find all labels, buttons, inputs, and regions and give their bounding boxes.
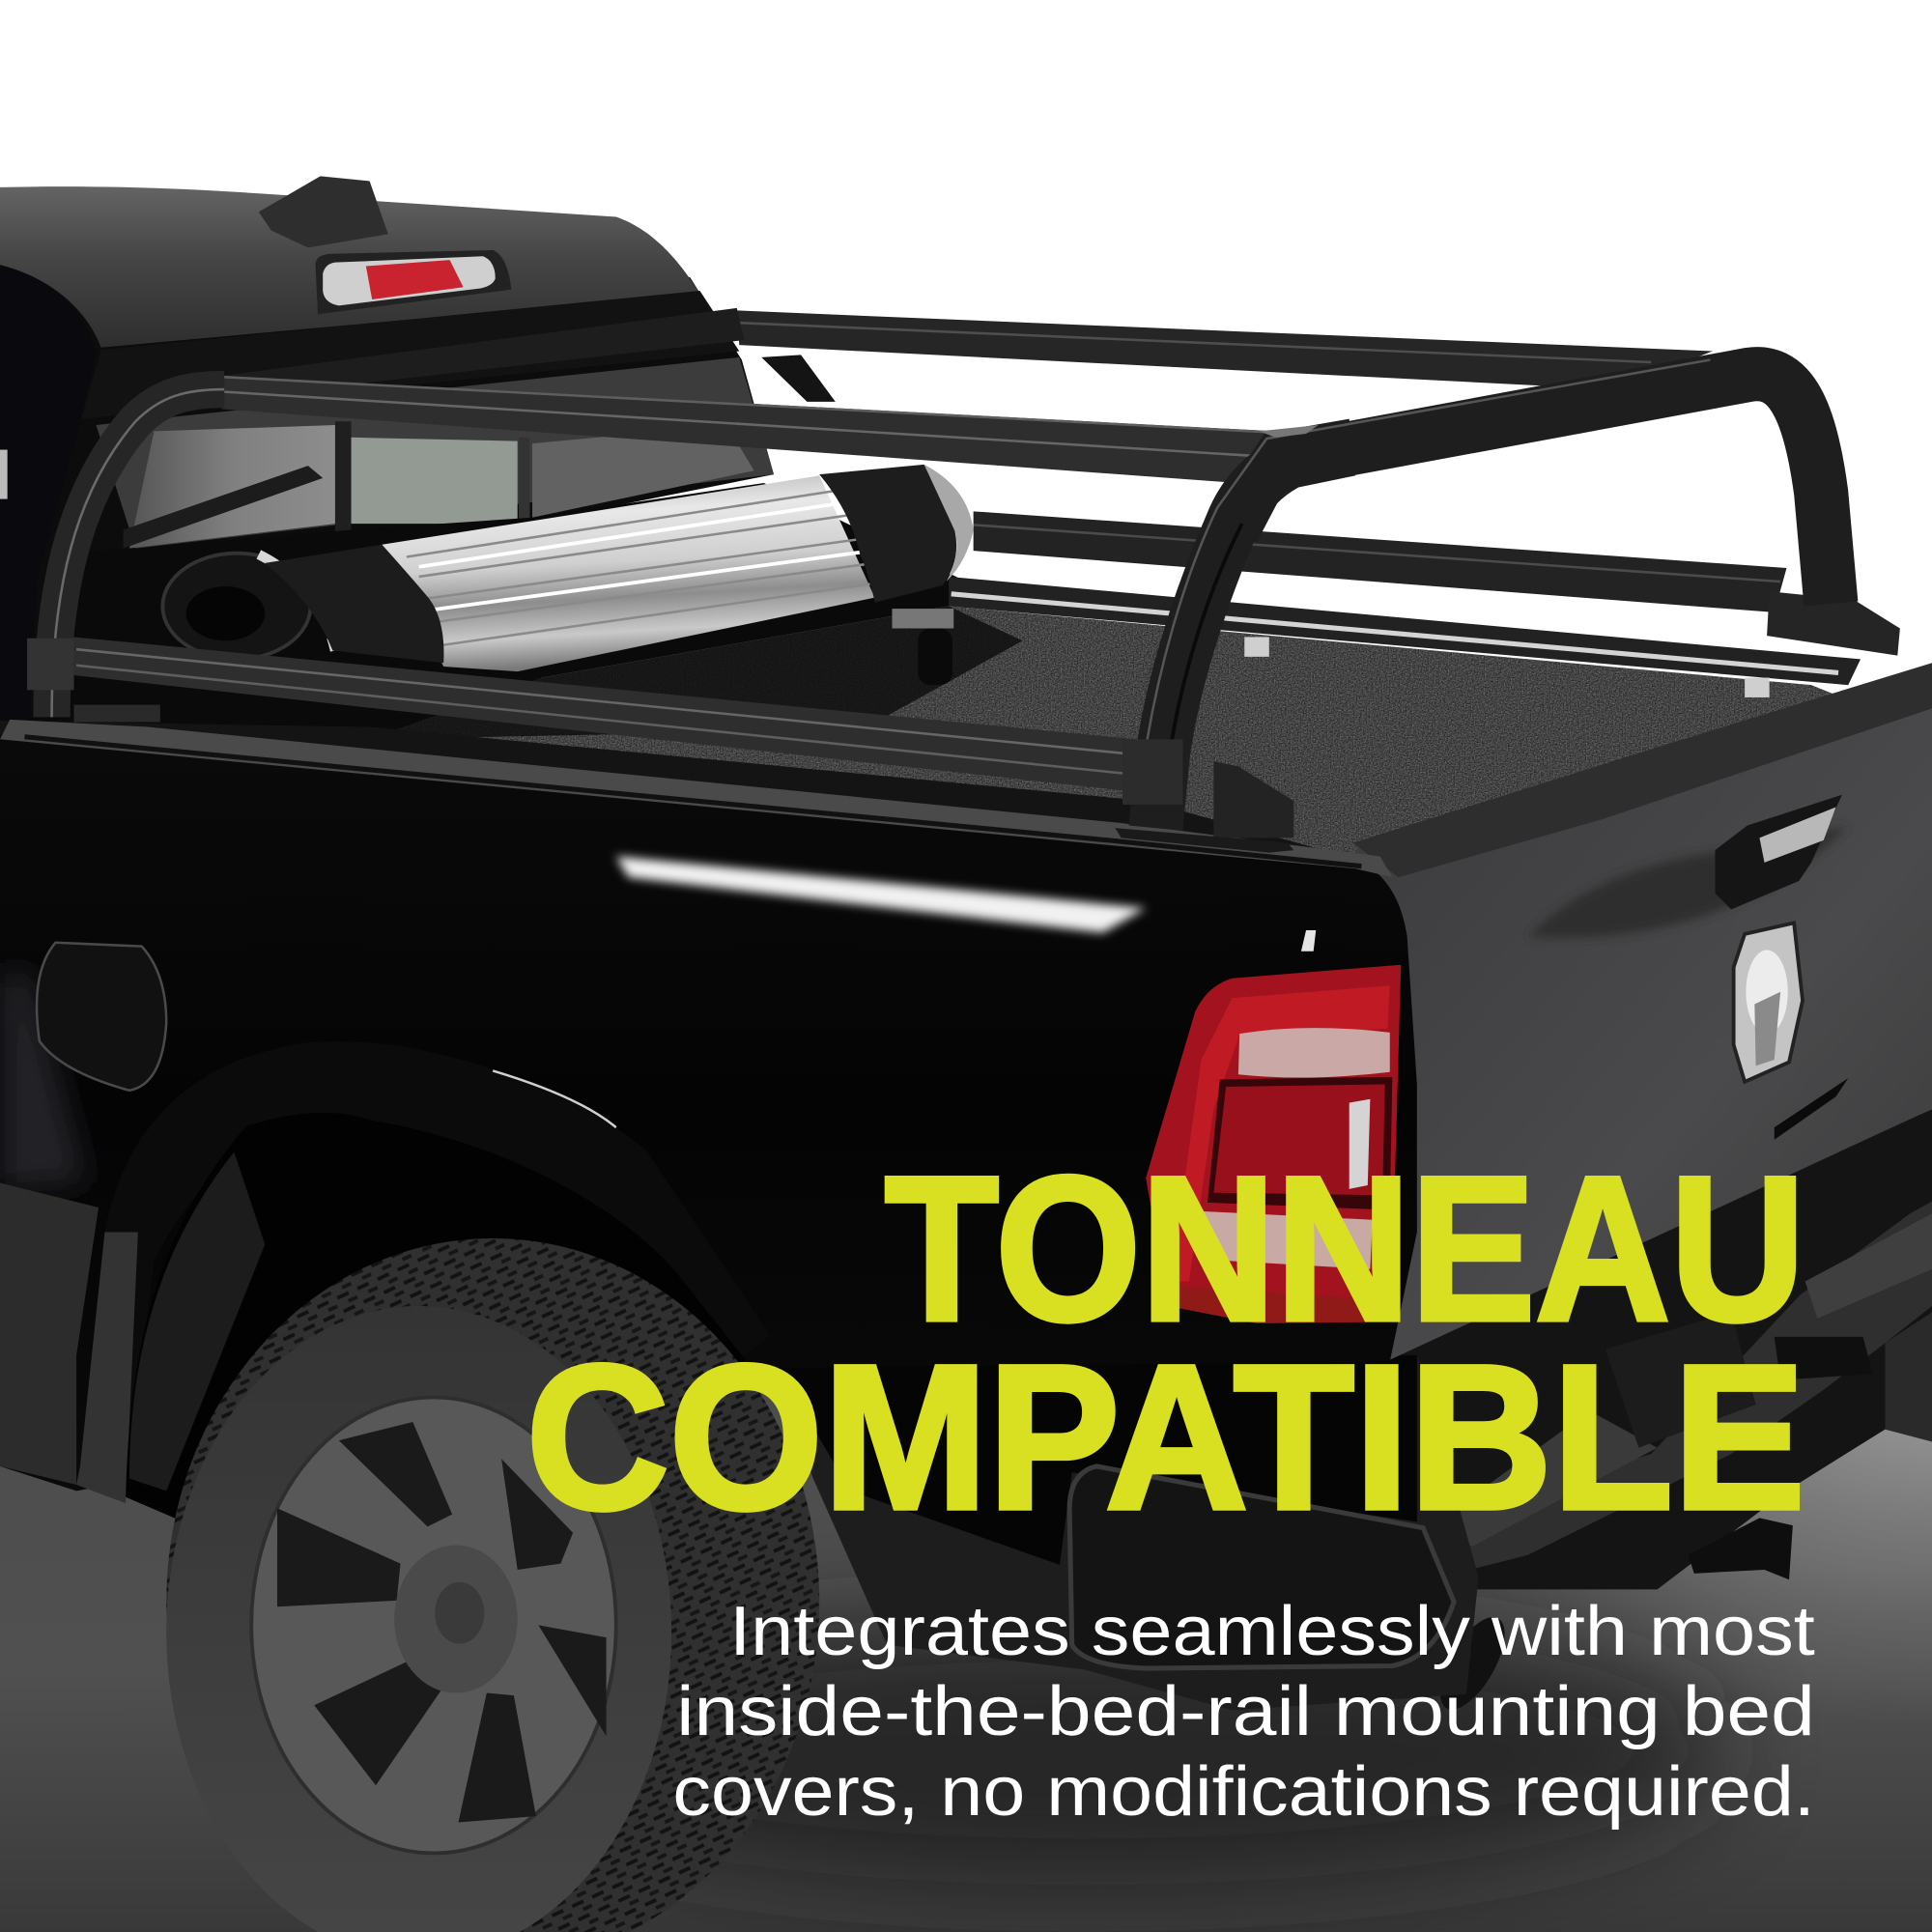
- far bed rail: [949, 577, 1861, 685]
- cab roof: [0, 186, 699, 348]
- wheel openings: [277, 1422, 607, 1822]
- corner cap: [1260, 425, 1319, 438]
- front rack arch: [27, 389, 224, 722]
- wheel hub: [394, 1545, 518, 1693]
- tailgate: [1355, 690, 1932, 1361]
- wheel liner: [129, 1152, 265, 1491]
- tailgate cap: [1353, 663, 1932, 877]
- rear window: [96, 357, 774, 549]
- cab-side top rail: [222, 308, 744, 401]
- icon: ram badge: [1734, 923, 1803, 1082]
- rack base plate: [1115, 828, 1293, 853]
- description line 2: inside-the-bed-rail mounting bed: [676, 1672, 1815, 1750]
- lower mudflap and underbody: [764, 1343, 1479, 1710]
- far lower bracket: [1767, 591, 1900, 656]
- title: tonneau compatible: [526, 1134, 1805, 1552]
- aluminum slats: [382, 475, 875, 671]
- far top rail: [737, 310, 1713, 389]
- cab back wall: [0, 252, 774, 739]
- far lower rail: [974, 511, 1786, 612]
- description line 3: covers, no modifications required.: [672, 1752, 1815, 1831]
- body highlight: [616, 856, 1146, 933]
- cab lower strip: [81, 291, 739, 419]
- rack mount plate: [1122, 739, 1182, 805]
- rear rack arch: [1115, 359, 1831, 853]
- title line 2: COMPATIBLE: [526, 1322, 1805, 1552]
- rack side bracket: [1213, 761, 1293, 838]
- truck body: [0, 663, 1932, 1719]
- rear bumper: [1386, 1109, 1932, 1589]
- tail light: [1146, 965, 1401, 1323]
- rolled tonneau cover: [162, 465, 974, 671]
- near top rail: [222, 376, 1275, 483]
- exhaust tip: [1428, 1607, 1518, 1719]
- bed bolts: [892, 609, 1770, 697]
- icon: shark fin antenna: [259, 176, 388, 247]
- far side of rack: [0, 310, 1873, 877]
- bed rail cap: [0, 720, 1392, 877]
- roller end: [162, 554, 310, 659]
- near rack: [27, 359, 1831, 853]
- near bed rail shadow: [0, 721, 1368, 877]
- near lower rail: [74, 637, 1136, 791]
- arch outer corner: [1210, 419, 1355, 542]
- cab pillar: [0, 265, 96, 739]
- grey floor: [0, 1355, 1932, 1932]
- bed interior shadow: [25, 483, 961, 752]
- rim: [251, 1397, 616, 1853]
- right black wrap: [819, 465, 956, 603]
- right end cap: [924, 465, 974, 582]
- title line 1: TONNEAU: [885, 1134, 1805, 1364]
- wheel well: [126, 1113, 788, 1602]
- third brake light: [316, 250, 511, 314]
- truck cab: [0, 176, 961, 752]
- lower left body panel: [0, 1182, 99, 1485]
- description line 1: Integrates seamlessly with most: [729, 1592, 1815, 1670]
- main bed side: [0, 734, 1417, 1491]
- tailgate handle: [1716, 795, 1842, 909]
- flare highlight: [493, 1070, 616, 1127]
- left lit panel: [0, 974, 86, 1189]
- left black wrap: [265, 545, 443, 663]
- trailer hitch: [1688, 1518, 1793, 1579]
- description text: [672, 1592, 1815, 1831]
- flare lower lit edge: [76, 1233, 138, 1503]
- far pillar strut: [761, 355, 836, 402]
- rear wheel: [166, 1238, 819, 1932]
- tire tread: [166, 1238, 819, 1932]
- fuel door: [37, 943, 166, 1091]
- tire sidewall: [166, 1306, 671, 1932]
- bed carpet: [396, 607, 1833, 854]
- fender flare: [80, 1041, 770, 1479]
